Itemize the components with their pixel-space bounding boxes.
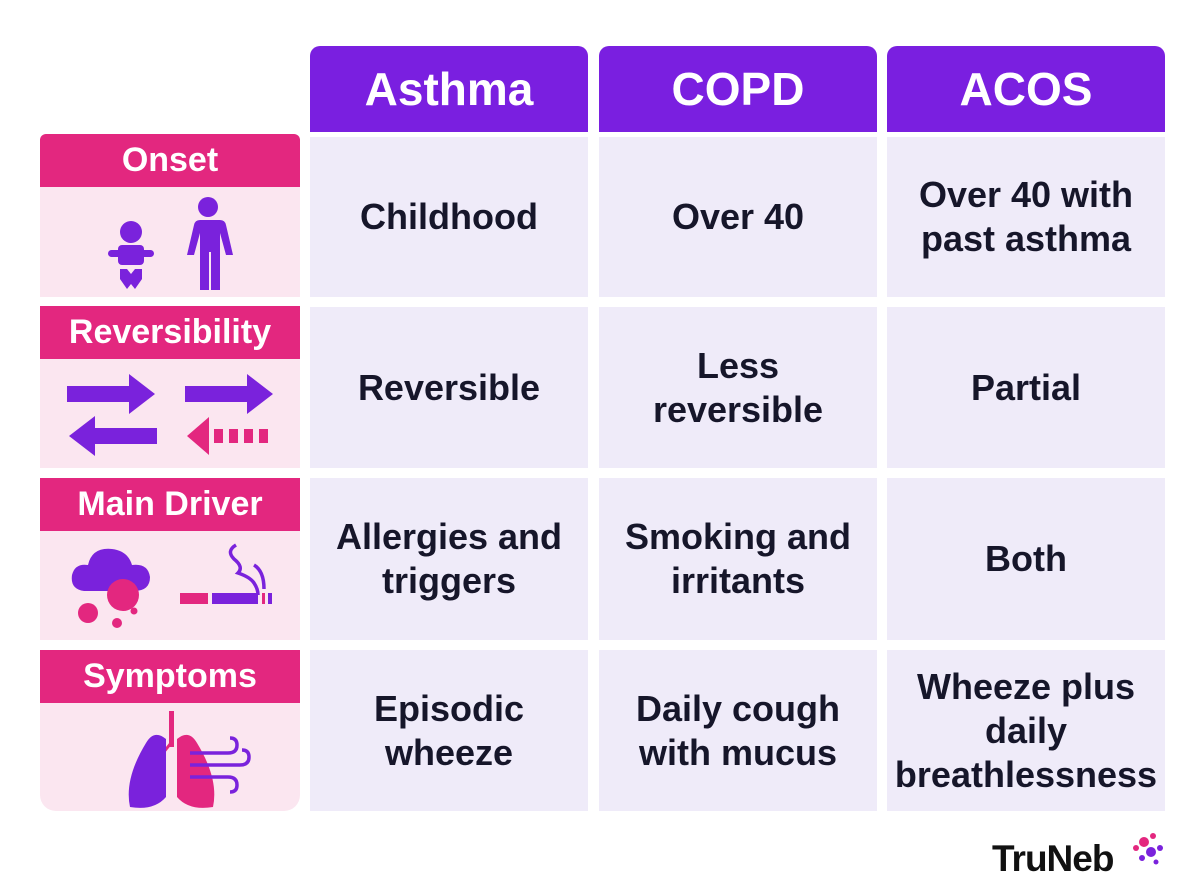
- text: with mucus: [639, 732, 837, 772]
- header: ACOS: [887, 46, 1165, 132]
- text: Both: [985, 538, 1067, 579]
- text: Over 40 with: [919, 174, 1133, 215]
- row label: Reversibility: Reversibility: [69, 313, 271, 351]
- logo: TruNeb: [992, 833, 1163, 879]
- row label: Symptoms: [40, 650, 300, 811]
- text: Wheeze plus: [917, 666, 1135, 706]
- text: Partial: [971, 366, 1081, 408]
- icon: lungs with wind: [128, 711, 251, 808]
- text: daily: [985, 710, 1067, 750]
- cells row 2: Reversible: [358, 366, 540, 408]
- header: Asthma: [310, 46, 588, 132]
- icon: baby and adult: [108, 197, 233, 290]
- logo: TruNeb: TruNeb: [992, 838, 1113, 879]
- row label: Main Driver: Main Driver: [77, 485, 263, 523]
- text: Less: [697, 344, 779, 386]
- row label: Onset: [40, 134, 300, 297]
- cells row 4: [310, 650, 588, 811]
- cells row 3: Allergies and: [336, 516, 562, 557]
- cells row 1: [310, 137, 588, 297]
- text: breathlessness: [895, 754, 1157, 794]
- cells row 4: wheeze: [385, 732, 513, 772]
- header: COPD: COPD: [672, 63, 804, 115]
- row label: Symptoms: Symptoms: [83, 657, 257, 695]
- header: COPD: [599, 46, 877, 132]
- row label: Reversibility: [40, 306, 300, 468]
- text: past asthma: [921, 218, 1131, 259]
- cells row 3: triggers: [382, 560, 516, 601]
- text: irritants: [671, 560, 805, 601]
- header: Asthma: Asthma: [365, 63, 533, 115]
- row label: Main Driver: [40, 478, 300, 640]
- cells row 3: [310, 478, 588, 640]
- text: Smoking and: [625, 516, 851, 557]
- cells row 1: Childhood: [360, 196, 538, 237]
- text: reversible: [653, 388, 823, 430]
- header: ACOS: ACOS: [960, 63, 1092, 115]
- row label: Onset: Onset: [122, 141, 218, 179]
- text: Over 40: [672, 196, 804, 237]
- text: Daily cough: [636, 688, 840, 728]
- cells row 4: Episodic: [374, 688, 524, 728]
- cells row 2: [310, 307, 588, 468]
- icon: arrows: [67, 374, 273, 456]
- icon: allergen cloud and cigarette: [72, 544, 272, 628]
